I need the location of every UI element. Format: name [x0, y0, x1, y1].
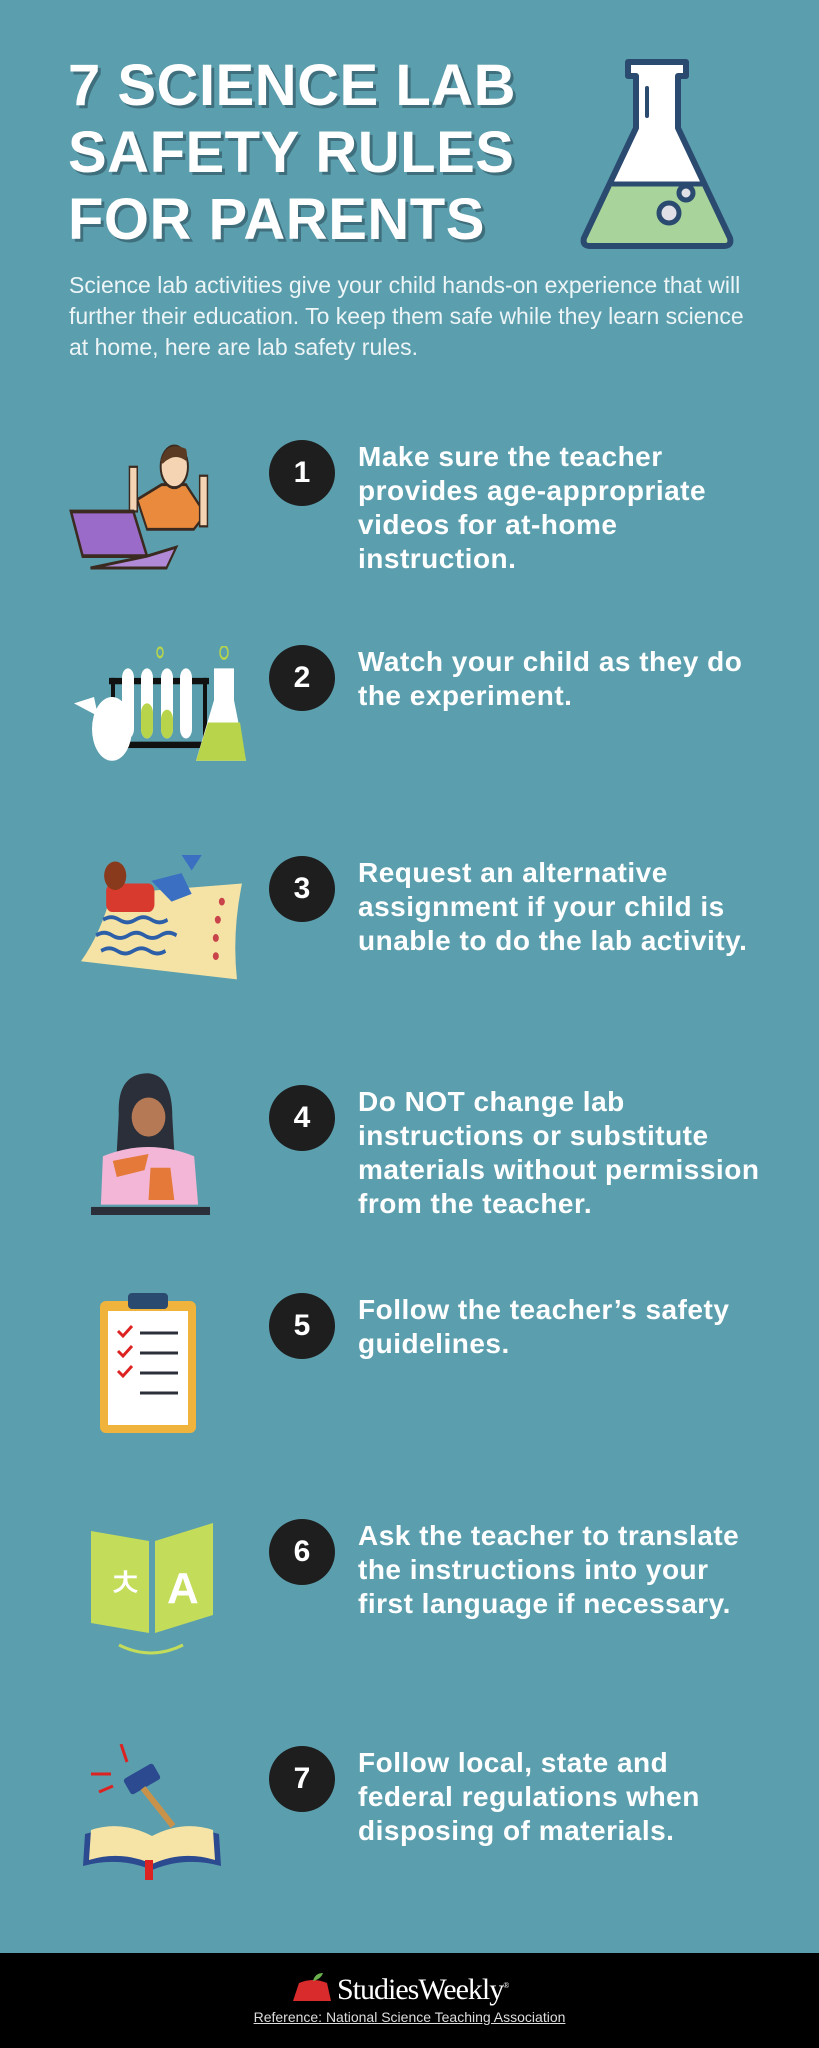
rule 5	[100, 1293, 729, 1433]
footer	[0, 1953, 819, 2048]
rule 3 text: Request an alternative assignment if your child is unable to do the lab activity.	[358, 857, 747, 956]
icon: translation book: ㅊ	[107, 1551, 144, 1609]
rule 4	[91, 1073, 759, 1219]
number badge 3: 3	[294, 872, 310, 905]
rule 7 text: Follow local, state and federal regulations when disposing of materials.	[358, 1747, 700, 1846]
rule 1	[69, 440, 706, 574]
icon: lab glassware	[74, 646, 246, 761]
number badge 5: 5	[294, 1309, 310, 1342]
rule 2	[74, 645, 742, 761]
icon: clipboard checklist	[100, 1293, 196, 1433]
rule 7	[83, 1744, 700, 1880]
rule 4 text: Do NOT change lab instructions or substitute materials without permission from the teacher.	[358, 1086, 759, 1219]
title: FOR PARENTS	[68, 187, 485, 252]
rule 2 text: Watch your child as they do the experiment.	[358, 646, 742, 711]
title	[68, 53, 516, 252]
icon: child with laptop	[69, 444, 208, 570]
rule 6 text: Ask the teacher to translate the instructions into your first language if necessary.	[358, 1520, 739, 1619]
icon: woman with beakers	[91, 1073, 210, 1215]
number badge 7: 7	[294, 1762, 310, 1795]
icon: translation book	[91, 1523, 213, 1654]
number badge 4	[269, 1085, 335, 1151]
number badge 5	[269, 1293, 335, 1359]
title: 7 SCIENCE LAB	[68, 53, 516, 118]
number badge 4: 4	[294, 1101, 310, 1134]
rule 6	[91, 1519, 739, 1654]
number badge 2	[269, 645, 335, 711]
rule 3	[81, 855, 747, 980]
title: SAFETY RULES	[68, 120, 514, 185]
number badge 7	[269, 1746, 335, 1812]
number badge 6: 6	[294, 1535, 310, 1568]
icon: header flask	[580, 59, 734, 249]
number badge 6	[269, 1519, 335, 1585]
rule 5 text: Follow the teacher’s safety guidelines.	[358, 1294, 729, 1359]
logo: Studies Weekly: StudiesWeekly®	[337, 1973, 508, 2006]
intro text: Science lab activities give your child hands-on experience that will further their education. To keep them safe while they learn science at home, here are lab safety rules.	[69, 272, 744, 360]
icon: gavel and book	[83, 1744, 221, 1880]
number badge 3	[269, 856, 335, 922]
icon: child writing on paper	[81, 855, 242, 980]
icon: translation book: A	[167, 1564, 199, 1613]
number badge 1: 1	[294, 456, 310, 489]
number badge 1	[269, 440, 335, 506]
reference text: Reference: National Science Teaching Association	[254, 2009, 565, 2025]
rule 1 text: Make sure the teacher provides age-appropriate videos for at-home instruction.	[358, 441, 706, 574]
number badge 2: 2	[294, 661, 310, 694]
